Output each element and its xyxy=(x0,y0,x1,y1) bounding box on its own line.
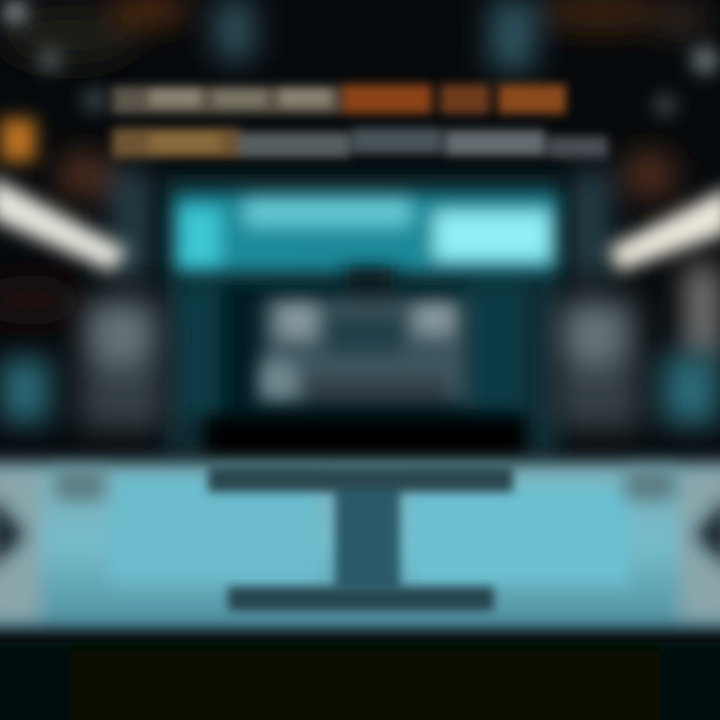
monitor content xyxy=(258,268,467,403)
left white light bar xyxy=(0,175,128,272)
monitor stand neck xyxy=(208,466,513,590)
monitor screen header xyxy=(174,194,558,272)
left speaker xyxy=(0,295,165,430)
glowing desk surface xyxy=(0,462,720,630)
monitor frame xyxy=(165,175,560,455)
background wall glow xyxy=(0,0,720,360)
right speaker xyxy=(555,295,720,430)
right white light bar xyxy=(608,186,720,272)
monitor stand base xyxy=(228,587,494,611)
small background bokeh xyxy=(0,0,719,162)
desk side shadows xyxy=(0,470,720,570)
desk front edge xyxy=(0,642,720,720)
top text band xyxy=(112,84,608,158)
dark lower edge of monitor xyxy=(205,418,525,464)
